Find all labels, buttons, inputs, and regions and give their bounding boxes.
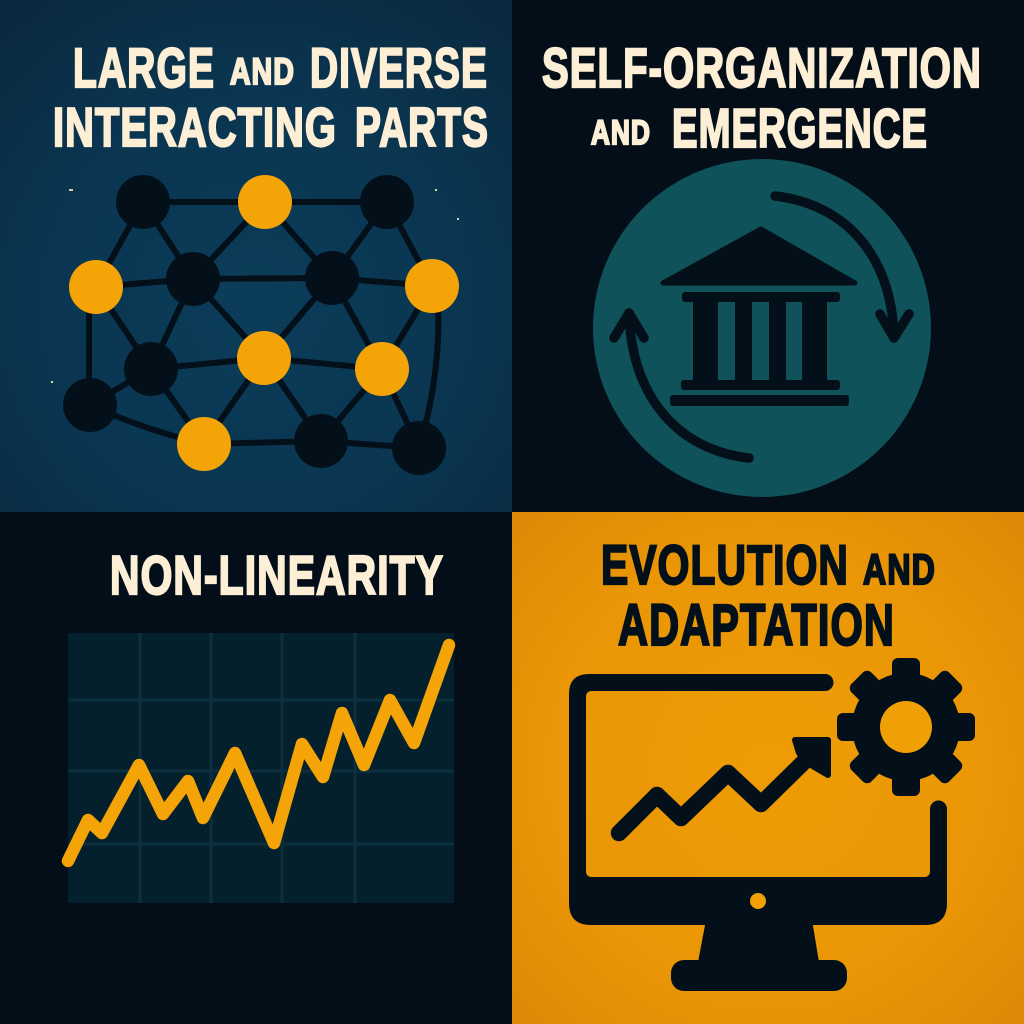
heading: evolution and: AND [863, 546, 936, 594]
panel: evolution and adaptation [512, 512, 1024, 1024]
heading: large and diverse [73, 36, 488, 99]
arrow: clockwise top right [775, 196, 909, 338]
icon: trend arrow [619, 740, 828, 833]
network diagram [63, 175, 459, 475]
panel: non-linearity [0, 512, 512, 1024]
heading: non-linearity: NON-LINEARITY [110, 544, 444, 606]
heading: interacting parts: PARTS [355, 96, 489, 158]
heading: large and diverse: AND [230, 51, 295, 92]
heading: large and diverse: LARGE [73, 36, 215, 99]
heading: evolution and: EVOLUTION [601, 533, 849, 596]
icon: gear [837, 658, 975, 796]
icon: institution building [663, 229, 855, 405]
heading: interacting parts: INTERACTING [53, 96, 337, 158]
heading: and emergence: AND [591, 114, 651, 152]
heading: adaptation: ADAPTATION [618, 593, 895, 658]
teal circle [593, 159, 931, 497]
line chart [68, 633, 454, 903]
arrow: clockwise bottom left [614, 313, 749, 458]
heading: large and diverse: DIVERSE [310, 36, 488, 99]
panel: self-organization and emergence [512, 0, 1024, 512]
heading: and emergence [591, 97, 928, 159]
icon: monitor [569, 674, 947, 991]
panel: large and diverse interacting parts [0, 0, 512, 512]
